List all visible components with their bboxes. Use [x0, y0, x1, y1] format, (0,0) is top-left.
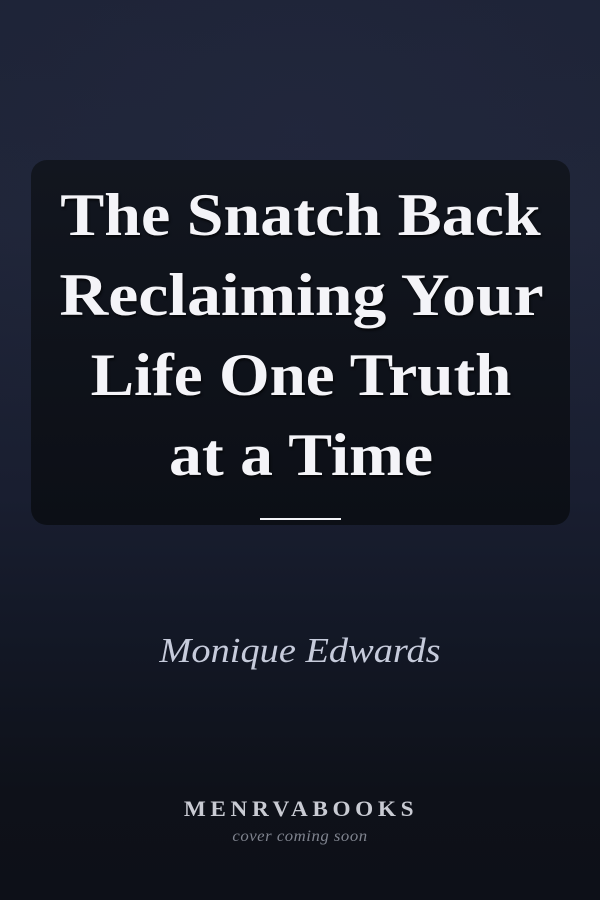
- accent rule under title: [260, 518, 341, 520]
- title: at a Time: [169, 422, 433, 488]
- cover status note: cover coming soon: [232, 828, 368, 845]
- title: Life One Truth: [91, 342, 511, 408]
- author name: Monique Edwards: [159, 631, 441, 670]
- publisher name: MENRVABOOKS: [184, 796, 418, 821]
- title: [59, 182, 544, 488]
- panel: title card: [31, 160, 570, 525]
- title: The Snatch Back: [60, 182, 541, 248]
- title: Reclaiming Your: [59, 262, 544, 328]
